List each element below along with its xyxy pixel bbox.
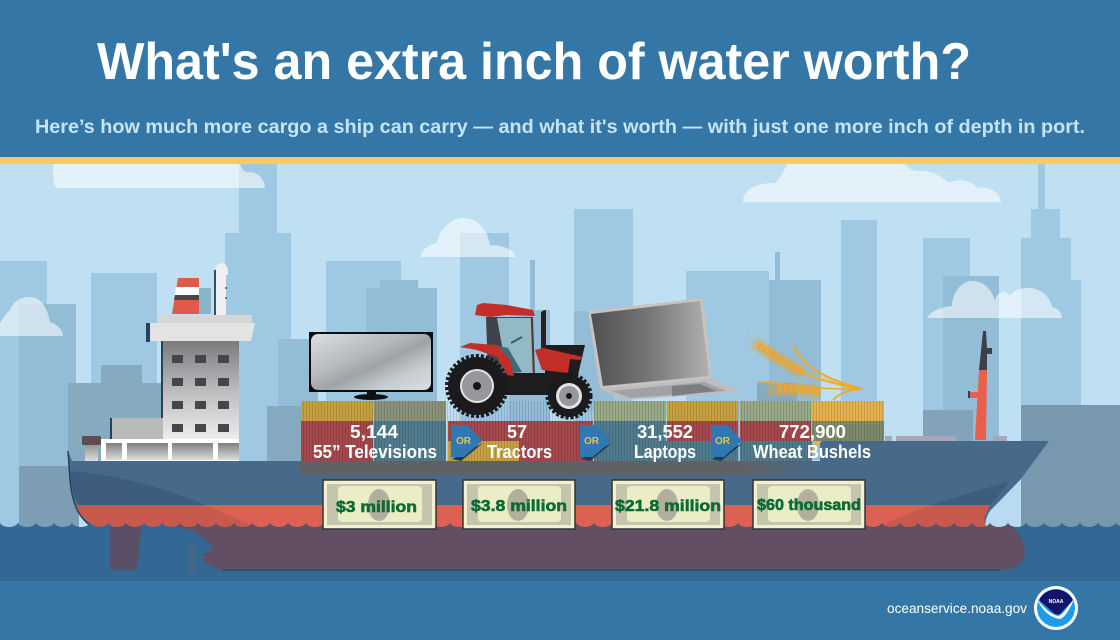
subtitle: Here’s how much more cargo a ship can carry — and what it's worth — with just one more inch of depth in port.: [35, 117, 1085, 138]
OR arrow 2: OR: [584, 436, 600, 447]
fore mast: [968, 331, 992, 440]
radar mast: [214, 263, 228, 315]
cargo labels: 31,552: [637, 422, 693, 442]
side block: [110, 418, 163, 439]
clouds: [0, 164, 1062, 336]
header band: [0, 0, 1120, 158]
deck fittings: [885, 436, 1007, 441]
fender: [460, 343, 514, 376]
cab: [486, 317, 535, 376]
cargo labels: Wheat Bushels: [753, 442, 871, 462]
bow reflection: [985, 480, 1021, 530]
cargo labels: 772,900: [779, 422, 846, 442]
lower deck: [101, 439, 239, 461]
underwater layer: sea and lower hull: [0, 522, 1120, 581]
website credit: oceanservice.noaa.gov: [887, 600, 1027, 616]
wheat icon: [748, 335, 862, 400]
front wheel: [547, 374, 591, 418]
chassis: [490, 345, 585, 395]
bridge deck: [146, 315, 255, 342]
bill: $21.8 million: [612, 480, 724, 529]
rudder: [110, 522, 142, 570]
hood: [535, 348, 583, 373]
tractor icon: [447, 303, 591, 418]
cargo ship: [0, 263, 1120, 581]
bill: $60 thousand: [753, 480, 865, 529]
sky background: [0, 160, 1120, 535]
cargo labels: Laptops: [634, 442, 696, 462]
OR arrow 3: OR: [715, 436, 731, 447]
icon: NOAA logo: NOAA: [1049, 599, 1064, 605]
gold divider: [0, 157, 1120, 164]
OR arrow 3: [711, 425, 743, 461]
cargo labels: [313, 422, 871, 462]
propeller: [188, 543, 204, 573]
bill: $3 million: [323, 480, 436, 529]
container shadow: [300, 461, 820, 475]
cargo labels: 57: [507, 422, 527, 442]
tower block with windows: [161, 341, 239, 441]
bill: $21.8 million: $21.8 million: [615, 498, 721, 515]
city skyline: [0, 164, 1120, 535]
cab roof: [475, 303, 535, 317]
cargo containers: [301, 401, 884, 461]
bill: $3 million: $3 million: [336, 499, 417, 516]
bill: $3.8 million: [463, 480, 575, 529]
icon: NOAA logo: [1034, 586, 1078, 630]
television icon: [309, 332, 433, 400]
laptop icon: [588, 298, 743, 400]
funnel: [172, 278, 211, 314]
bill: $3.8 million: $3.8 million: [471, 498, 567, 515]
cargo labels: Tractors: [487, 442, 552, 462]
title: What's an extra inch of water worth?: [97, 33, 971, 91]
OR arrow 1: [451, 425, 483, 461]
rear wheel: [447, 356, 507, 416]
OR arrow 2: [580, 425, 612, 461]
lower hull: [162, 522, 1025, 570]
OR arrow 1: OR: [456, 436, 472, 447]
footer band: [0, 581, 1120, 640]
cargo labels: 55” Televisions: [313, 442, 437, 462]
hull above the waterline: [68, 441, 1049, 534]
sea: [0, 522, 1120, 581]
exhaust vent: [82, 436, 101, 461]
exhaust pipe: [541, 310, 546, 350]
superstructure: [82, 263, 255, 461]
cargo labels: 5,144: [350, 422, 398, 442]
bill: $60 thousand: $60 thousand: [757, 497, 861, 514]
